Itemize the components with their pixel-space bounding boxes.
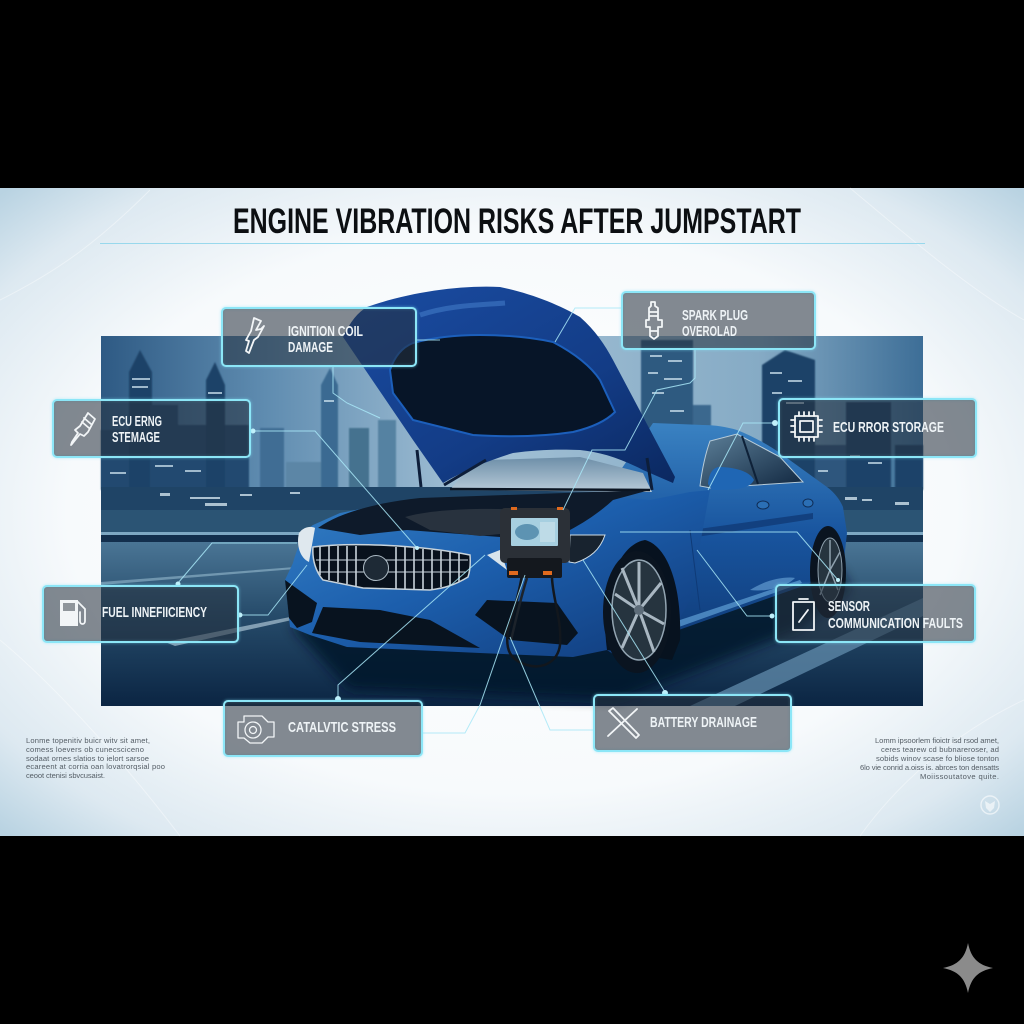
card: ecu erng storage: STEMAGE [112, 429, 160, 446]
highway barrier [101, 510, 923, 532]
hood struts [417, 450, 652, 490]
sill highlight [674, 580, 802, 628]
mirror [708, 467, 754, 490]
background arcs [0, 188, 1024, 836]
icon: spark plug [646, 302, 662, 339]
card: catalytic stress [224, 701, 422, 756]
car [285, 287, 850, 700]
card: spark plug overload [622, 292, 815, 349]
front wheel [603, 540, 680, 673]
front body [285, 490, 710, 672]
text block: right note: sobids winov scase fo bliose tonton [876, 754, 999, 763]
city skyline [101, 340, 923, 490]
text block: right note: ceres tearew cd bubnareroser, ad [881, 745, 999, 754]
card: fuel inefficiency: FUEL INNEFIICIENCY [102, 604, 207, 621]
card: sensor communication faults: COMMUNICATION FAULTS [828, 615, 963, 632]
side windows [700, 434, 803, 488]
icon: engine [238, 716, 274, 743]
road [101, 542, 923, 706]
card: ignition coil damage: DAMAGE [288, 339, 333, 356]
connector nodes [176, 420, 840, 702]
card: ignition coil damage: IGNITION COIL [288, 323, 363, 340]
city lights [110, 355, 882, 474]
card: ecu erng storage: ECU ERNG [112, 413, 162, 430]
text block: right note: 6lo vie conrid a.oiss is. abrces ton densatts [860, 763, 999, 772]
wiper [450, 489, 650, 490]
card: ecu error storage [779, 399, 976, 457]
card: ecu erng storage [53, 400, 250, 457]
windshield [450, 457, 652, 492]
text block: right note: Lomm ipsoorlem fioictr isd rsod amet, [875, 736, 999, 745]
connector lines [178, 308, 838, 733]
rear wheel [810, 526, 846, 618]
card: ignition coil damage [222, 308, 416, 366]
card: sensor communication faults: SENSOR [828, 598, 870, 615]
icon: crossed tools [608, 708, 639, 738]
door handles [757, 501, 769, 509]
card: battery drainage [594, 695, 791, 751]
icon: chip [791, 412, 822, 441]
door line [690, 530, 700, 610]
diagnostic cables [507, 575, 560, 666]
lower air intakes [285, 580, 317, 628]
dark band with lights behind road [101, 487, 923, 510]
hood liner [390, 335, 615, 436]
card: catalytic stress: CATALVTIC STRESS [288, 719, 396, 736]
engine bay [318, 490, 650, 537]
diagnostic tablet [500, 507, 570, 578]
text block: left note: comess loevers ob cunecsciceno [26, 745, 144, 754]
card: ecu error storage: ECU RROR STORAGE [833, 419, 944, 436]
icon: small corner badge [981, 796, 999, 814]
icon: battery [793, 599, 814, 630]
car side body [600, 423, 847, 672]
car shadow [290, 570, 850, 700]
text block: right note: Moiissoutatove quite. [920, 772, 999, 781]
card: battery drainage: BATTERY DRAINAGE [650, 714, 757, 731]
title: ENGINE VIBRATION RISKS AFTER JUMPSTART [233, 202, 801, 241]
left headlight [298, 527, 315, 562]
body crease [677, 513, 813, 540]
open hood [343, 287, 675, 483]
card: spark plug overload: SPARK PLUG [682, 307, 748, 324]
icon: fuel pump [60, 600, 85, 626]
text block: left note: sodaat ornes slatios to ielort sarsoe [26, 754, 149, 763]
icon: sparkle watermark [943, 943, 993, 993]
text block: left note [26, 736, 165, 780]
scene photo: city and road [101, 336, 923, 706]
right headlight [569, 535, 605, 563]
grille [313, 545, 470, 590]
page background panel [0, 188, 1024, 836]
icon: spark plug tilted [71, 413, 95, 445]
text block: right note [860, 736, 999, 781]
text block: left note: ceoot ctenisi sbvcusaist. [26, 771, 105, 780]
card: spark plug overload: OVEROLAD [682, 323, 737, 340]
title divider [100, 243, 925, 244]
icon: ignition coil [246, 318, 264, 353]
text block: left note: Lonme topenitiv buicr witv sit amet, [26, 736, 150, 745]
card: fuel inefficiency [43, 586, 238, 642]
text block: left note: ecareent at corria oan lovatrorqsial poo [26, 762, 165, 771]
card: sensor communication faults [776, 585, 975, 642]
